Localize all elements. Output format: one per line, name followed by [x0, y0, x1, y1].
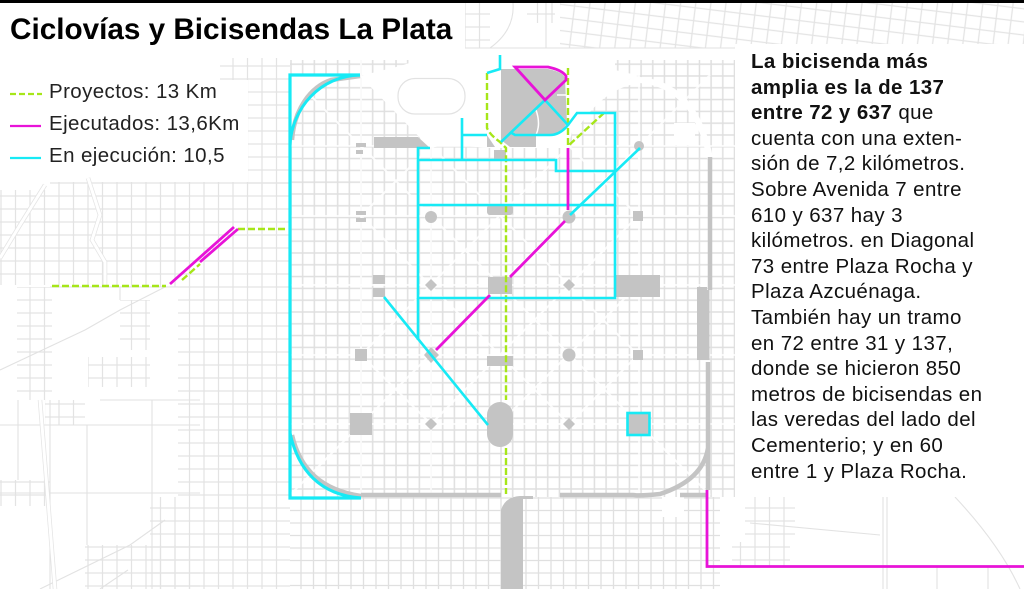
ring road clearing top right — [572, 80, 710, 158]
text block: Cementerio; y en 60 — [751, 434, 943, 457]
text block — [751, 50, 982, 482]
text block: metros de bicisendas en — [751, 383, 982, 406]
avenues and diagonals — [290, 60, 735, 497]
text block: sión de 7,2 kilómetros. — [751, 152, 965, 175]
title: Ciclovías y Bicisendas La Plata — [10, 13, 452, 46]
text block: entre 72 y 637 que — [751, 101, 934, 124]
racetrack outline — [398, 78, 465, 114]
text block: 610 y 637 hay 3 — [751, 204, 903, 227]
text block: kilómetros. en Diagonal — [751, 229, 974, 252]
legend: in execution: En ejecución: 10,5 — [49, 144, 225, 167]
city grid — [290, 60, 735, 497]
text block: las veredas del lado del — [751, 408, 976, 431]
legend: projects: Proyectos: 13 Km — [49, 80, 217, 103]
text block: entre 1 y Plaza Rocha. — [751, 460, 967, 482]
text block: Plaza Azcuénaga. — [751, 280, 922, 303]
white panel behind text — [735, 44, 1024, 497]
text block: donde se hicieron 850 — [751, 357, 961, 380]
park paths — [536, 95, 568, 135]
text block: 73 entre Plaza Rocha y — [751, 255, 973, 278]
route: projects (green dashed) — [52, 68, 605, 494]
clearings inside the grid — [662, 123, 695, 517]
park and hippodrome clearing — [360, 50, 640, 148]
text block: Sobre Avenida 7 entre — [751, 178, 962, 201]
top-left corner clearing — [291, 76, 360, 145]
legend keys — [10, 94, 42, 158]
top black bar — [0, 0, 1024, 3]
route: executed (magenta) — [170, 67, 1024, 566]
route: in execution (cyan) — [290, 55, 650, 498]
grey ring road — [292, 76, 710, 496]
text block: en 72 entre 31 y 137, — [751, 332, 953, 355]
grey plazas — [350, 69, 707, 589]
widened road bands — [0, 178, 105, 589]
legend: executed: Ejecutados: 13,6Km — [49, 112, 240, 135]
text block: También hay un tramo — [751, 306, 962, 329]
text block: La bicisenda más — [751, 50, 928, 73]
text block: amplia es la de 137 — [751, 76, 944, 99]
text block: cuenta con una exten- — [751, 127, 962, 150]
